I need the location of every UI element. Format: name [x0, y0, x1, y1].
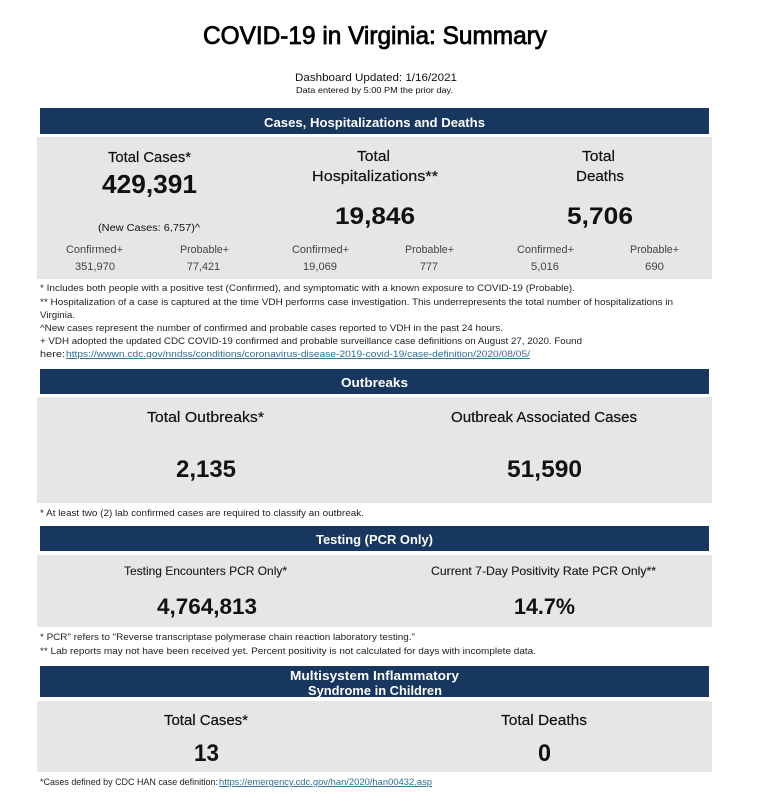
positivity rate [431, 564, 656, 619]
total cases: 77,421 [187, 261, 220, 273]
outbreak associated cases: Outbreak Associated Cases [451, 409, 637, 426]
MIS-C total deaths: 0 [538, 740, 551, 767]
total cases: 351,970 [75, 261, 115, 273]
total hospitalizations: Total [357, 148, 390, 165]
total deaths: Confirmed+ [517, 244, 574, 256]
MIS-C total deaths: Total Deaths [501, 712, 587, 729]
banner: testing: Testing (PCR Only) [316, 533, 433, 547]
footnotes: testing [40, 632, 536, 657]
outbreak associated cases [451, 409, 637, 483]
total hospitalizations: Confirmed+ [292, 244, 349, 256]
total cases: Confirmed+ [66, 244, 123, 256]
footnotes: cases section: + VDH adopted the updated CDC COVID-19 confirmed and probable surveillance case definitions on August 27, 2020. Found [40, 336, 582, 347]
total outbreaks [147, 409, 264, 483]
footnotes: testing: * PCR" refers to "Reverse transcriptase polymerase chain reaction laboratory testing." [40, 632, 415, 643]
dashboard update date: Dashboard Updated: 1/16/2021 [295, 72, 457, 84]
banner: cases, hospitalizations and deaths [40, 108, 709, 134]
footnote: MIS-C: https://emergency.cdc.gov/han/2020/han00432.asp [219, 777, 432, 788]
footnotes: cases section: ^New cases represent the number of confirmed and probable cases reported to VDH in the past 24 hours. [40, 323, 503, 334]
total deaths: 5,706 [567, 203, 633, 230]
data entry note: Data entered by 5:00 PM the prior day. [296, 85, 453, 95]
banner: multisystem inflammatory syndrome in children: Syndrome in Children [308, 684, 442, 698]
total deaths: 5,016 [531, 261, 559, 273]
panel: testing [37, 555, 712, 627]
testing encounters [124, 564, 287, 619]
testing encounters: Testing Encounters PCR Only* [124, 564, 287, 578]
total cases: Total Cases* [108, 149, 191, 166]
banner: cases, hospitalizations and deaths: Cases, Hospitalizations and Deaths [264, 116, 485, 130]
total hospitalizations: 777 [420, 261, 438, 273]
footnotes: cases section: here: [40, 349, 65, 360]
outbreak associated cases: 51,590 [507, 456, 582, 483]
panel: outbreaks [37, 397, 712, 503]
total cases: 429,391 [102, 169, 197, 199]
positivity rate: Current 7-Day Positivity Rate PCR Only** [431, 564, 656, 578]
total deaths [517, 148, 679, 273]
footnote: MIS-C: *Cases defined by CDC HAN case definition: [40, 777, 218, 788]
MIS-C total cases: Total Cases* [164, 712, 248, 729]
footnotes: cases section: ** Hospitalization of a case is captured at the time VDH performs case investigation. This underrepresents the total number of hospitalizations in [40, 297, 673, 308]
footnotes: testing: ** Lab reports may not have been received yet. Percent positivity is not calculated for days with incomplete data. [40, 646, 536, 657]
footnote: outbreaks: * At least two (2) lab confirmed cases are required to classify an outbreak. [40, 508, 364, 519]
total deaths: Total [582, 148, 615, 165]
banner: outbreaks: Outbreaks [341, 376, 408, 390]
total cases: (New Cases: 6,757)^ [98, 222, 200, 234]
banner: outbreaks [40, 369, 709, 394]
banner: testing [40, 526, 709, 551]
total hospitalizations [292, 148, 454, 273]
panel: cases, hospitalizations and deaths [37, 137, 712, 279]
banner: multisystem inflammatory syndrome in children: Multisystem Inflammatory [290, 669, 459, 683]
total outbreaks: Total Outbreaks* [147, 409, 264, 426]
footnotes: cases section: Virginia. [40, 310, 75, 321]
total deaths: Deaths [576, 168, 624, 185]
footnote: MIS-C [40, 777, 432, 788]
footnotes: cases section: https://wwwn.cdc.gov/nndss/conditions/coronavirus-disease-2019-covid-19/case-definition/2020/08/05/ [66, 349, 530, 360]
total cases [66, 149, 229, 273]
title: COVID-19 in Virginia: Summary [203, 22, 547, 50]
positivity rate: 14.7% [514, 594, 575, 619]
testing encounters: 4,764,813 [157, 594, 257, 619]
MIS-C total cases [164, 712, 248, 767]
total cases: Probable+ [180, 244, 229, 256]
banner: multisystem inflammatory syndrome in children [40, 666, 709, 698]
total outbreaks: 2,135 [176, 456, 236, 483]
footnotes: cases section [40, 283, 673, 360]
total hospitalizations: 19,846 [335, 203, 415, 230]
total hospitalizations: Hospitalizations** [312, 168, 438, 185]
MIS-C total deaths [501, 712, 587, 767]
panel: multisystem inflammatory syndrome in children [37, 701, 712, 772]
MIS-C total cases: 13 [194, 740, 219, 767]
total deaths: 690 [645, 261, 664, 273]
footnotes: cases section: * Includes both people with a positive test (Confirmed), and symptomatic with a known exposure to COVID-19 (Probable). [40, 283, 575, 294]
total hospitalizations: 19,069 [303, 261, 337, 273]
total deaths: Probable+ [630, 244, 679, 256]
total hospitalizations: Probable+ [405, 244, 454, 256]
